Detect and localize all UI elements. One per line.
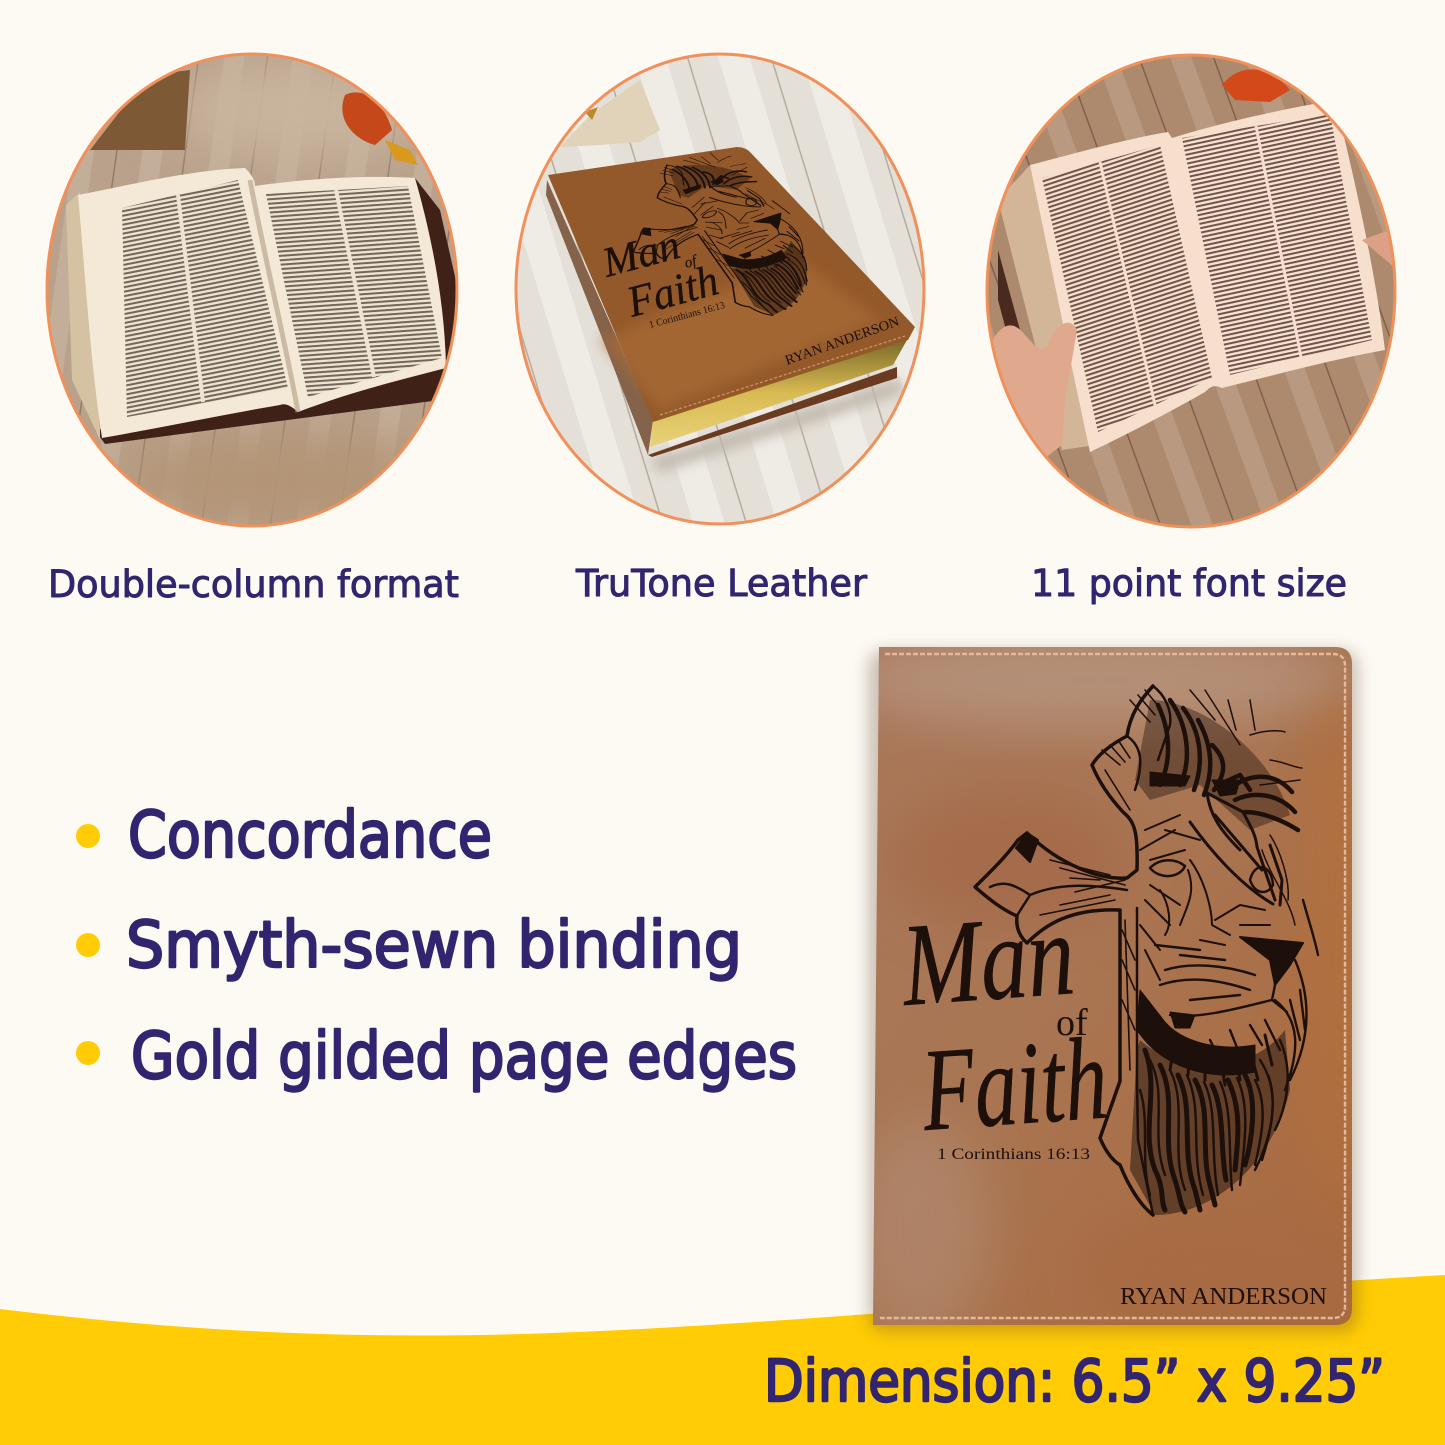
book cover (548, 147, 915, 422)
engraved title: Man of Faith: Faith (917, 1012, 1111, 1156)
caption: 11 point font size: 11 point font size (1031, 562, 1347, 605)
bullet: concordance: Concordance (128, 799, 492, 873)
book spine (546, 180, 653, 455)
photo: closed TruTone leather bible (510, 50, 930, 530)
small book text: 1 Corinthians 16:13 (648, 300, 726, 331)
dimension label: Dimension: 6.5” x 9.25” (764, 1347, 1385, 1415)
engraved name: RYAN ANDERSON (1120, 1284, 1327, 1310)
caption: double-column format: Double-column format (48, 563, 459, 606)
book lower cover (648, 367, 897, 457)
small book text: of (683, 253, 700, 272)
yellow wave band (0, 1275, 1445, 1445)
small lion engraving (633, 152, 808, 316)
photo: hands holding bible, 11 point font (980, 50, 1400, 530)
caption: trutone leather: TruTone Leather (575, 562, 868, 605)
small book text: RYAN ANDERSON (783, 315, 901, 369)
feature list (76, 799, 797, 1094)
small book text: Faith (621, 256, 723, 327)
engraved verse: 1 Corinthians 16:13 (937, 1146, 1090, 1163)
small book text: Man (597, 222, 685, 287)
engraved title: Man of Faith: Man (896, 888, 1078, 1031)
bullet: gold gilded page edges: Gold gilded page edges (131, 1020, 797, 1094)
engraved title: Man of Faith: of (1056, 1002, 1088, 1044)
lion and cross engraving (975, 686, 1318, 1215)
gold page edges (650, 340, 907, 447)
small book text (604, 239, 899, 365)
engraved title: Man of Faith (896, 888, 1111, 1156)
bullet: smyth-sewn binding: Smyth-sewn binding (126, 909, 742, 983)
large leather bible cover (840, 630, 1380, 1340)
photo: open bible double-column (40, 50, 460, 530)
